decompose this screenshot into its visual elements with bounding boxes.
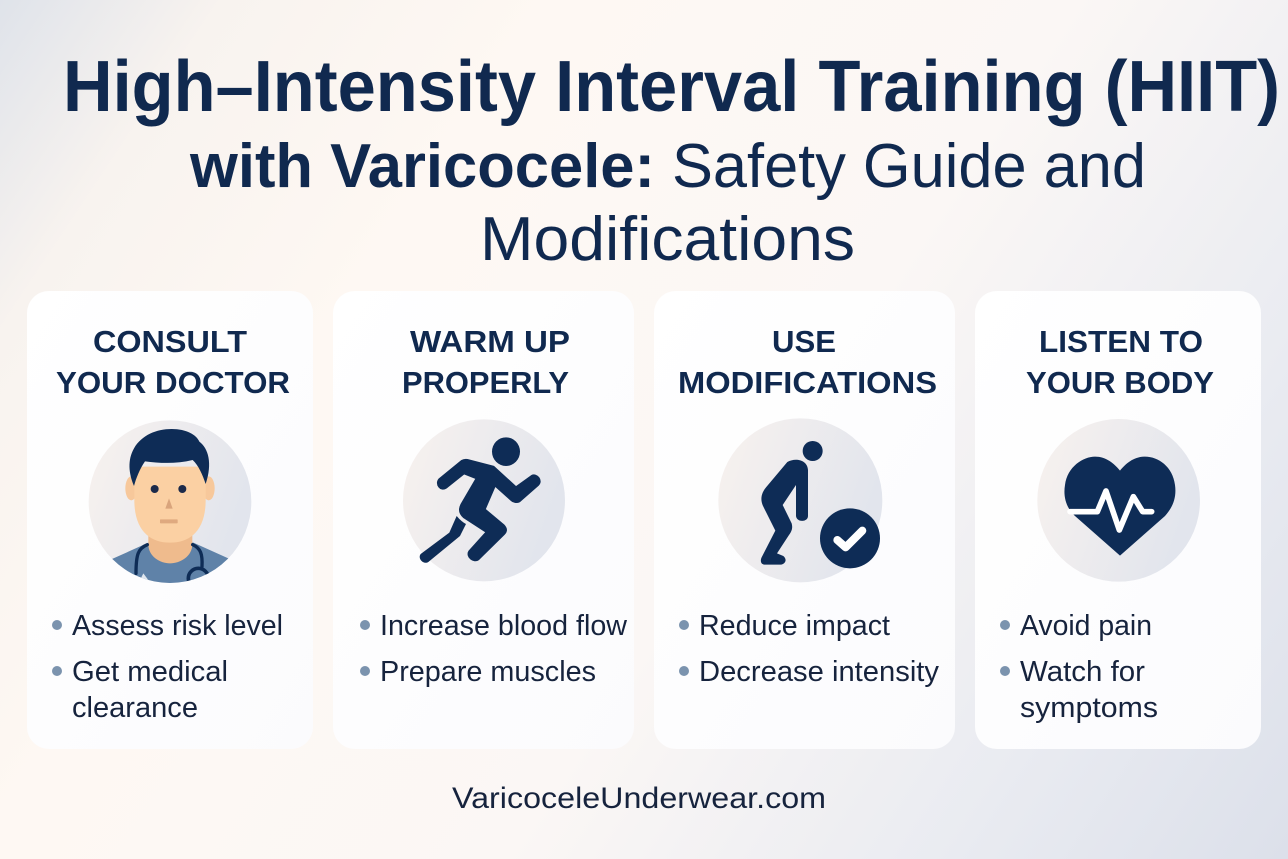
panel: listen to your body	[975, 291, 1261, 749]
bullet list: Watch for	[1020, 656, 1145, 688]
panel: warm up properly	[333, 291, 634, 749]
heading: listen to your body	[1026, 324, 1214, 400]
title: Safety Guide and	[672, 132, 1146, 201]
heading: warm up properly: WARM UP	[410, 324, 570, 359]
icon: squat with check	[718, 418, 882, 582]
heading: use modifications	[678, 324, 937, 400]
bullet list: Reduce impact	[699, 610, 890, 642]
heading: use modifications: USE	[772, 324, 836, 359]
heading: listen to your body: YOUR BODY	[1026, 365, 1214, 400]
footer website: VaricoceleUnderwear.com	[452, 782, 826, 815]
bullet list: Increase blood flow	[380, 610, 628, 642]
bullet list: Assess risk level	[72, 610, 283, 642]
panel: use modifications	[654, 291, 955, 749]
icon: heart with pulse	[1037, 419, 1200, 582]
heading: listen to your body: LISTEN TO	[1039, 324, 1203, 359]
title: Modifications	[480, 205, 855, 274]
heading: warm up properly: PROPERLY	[402, 365, 569, 400]
bullet list	[1000, 610, 1158, 724]
icon: runner	[403, 419, 565, 581]
heading: warm up properly	[402, 324, 570, 400]
bullet list: Prepare muscles	[380, 656, 596, 688]
heading: use modifications: MODIFICATIONS	[678, 365, 937, 400]
bullet list	[679, 610, 939, 688]
heading: consult your doctor	[56, 324, 290, 400]
title	[63, 47, 1280, 274]
icon: doctor	[89, 420, 251, 588]
title: with Varicocele:	[189, 132, 655, 201]
heading: consult your doctor: CONSULT	[93, 324, 247, 359]
bullet list: Decrease intensity	[699, 656, 939, 688]
bullet list: Avoid pain	[1020, 610, 1152, 642]
bullet list: Get medical	[72, 656, 228, 688]
bullet list	[360, 610, 628, 688]
bullet list: clearance	[72, 692, 198, 724]
bullet list: symptoms	[1020, 692, 1158, 724]
panel: consult your doctor	[27, 291, 313, 749]
heading: consult your doctor: YOUR DOCTOR	[56, 365, 290, 400]
bullet list	[52, 610, 283, 724]
